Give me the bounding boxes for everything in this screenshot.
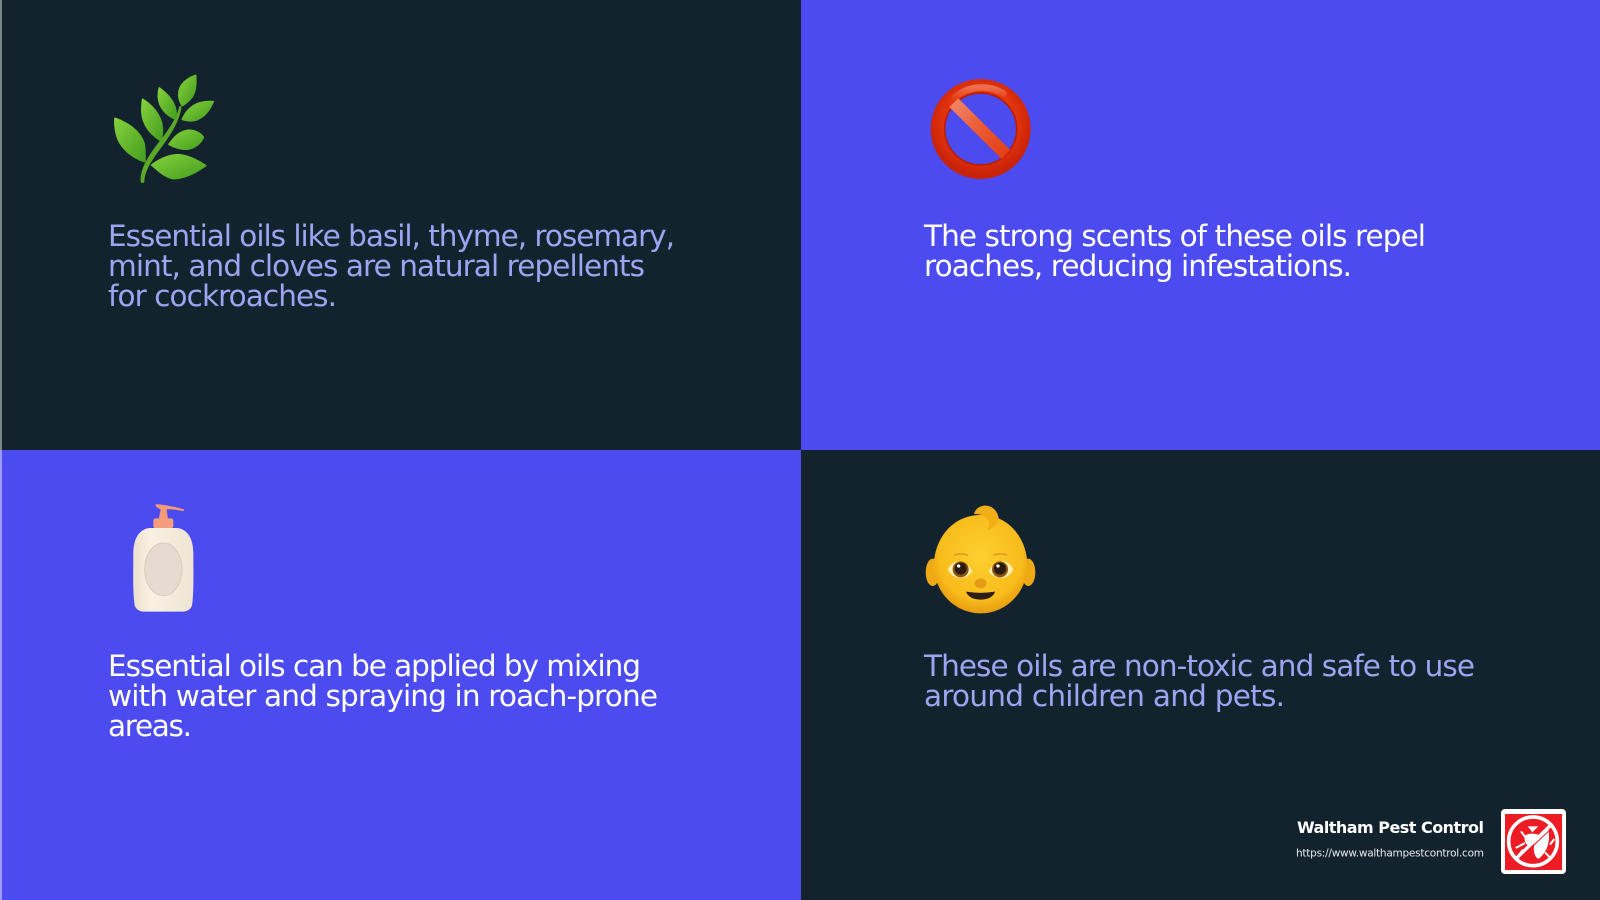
text: strong scents: The strong scents of these oils repel: [923, 219, 1426, 253]
brand: Waltham Pest Control: [1296, 809, 1566, 874]
text: application: Essential oils can be applied by mixing: [108, 649, 641, 683]
brand url: https://www.walthampestcontrol.com: [1296, 848, 1484, 860]
text: application: with water and spraying in roach-prone: [108, 679, 658, 713]
panel: application: [0, 450, 801, 900]
text: natural repellents: mint, and cloves are natural repellents: [108, 249, 645, 283]
panel: strong scents: [801, 0, 1600, 450]
text: application: areas.: [108, 709, 192, 743]
logo: no bugs: [1501, 809, 1566, 874]
text: safety: These oils are non-toxic and safe to use: [923, 649, 1475, 683]
panel: natural repellents: [0, 0, 801, 450]
text: natural repellents: for cockroaches.: [108, 279, 337, 313]
panel: safety: [801, 450, 1600, 900]
icon: lotion bottle: [133, 504, 193, 612]
icon: baby face: [926, 506, 1035, 613]
text: natural repellents: Essential oils like basil, thyme, rosemary,: [108, 219, 675, 253]
text: safety: around children and pets.: [924, 679, 1285, 713]
text: strong scents: roaches, reducing infestations.: [924, 249, 1352, 283]
brand name: Waltham Pest Control: [1297, 818, 1484, 837]
icon: herb sprig: [115, 75, 213, 183]
icon: prohibited sign: [938, 86, 1023, 172]
left edge strip: [0, 0, 2, 900]
